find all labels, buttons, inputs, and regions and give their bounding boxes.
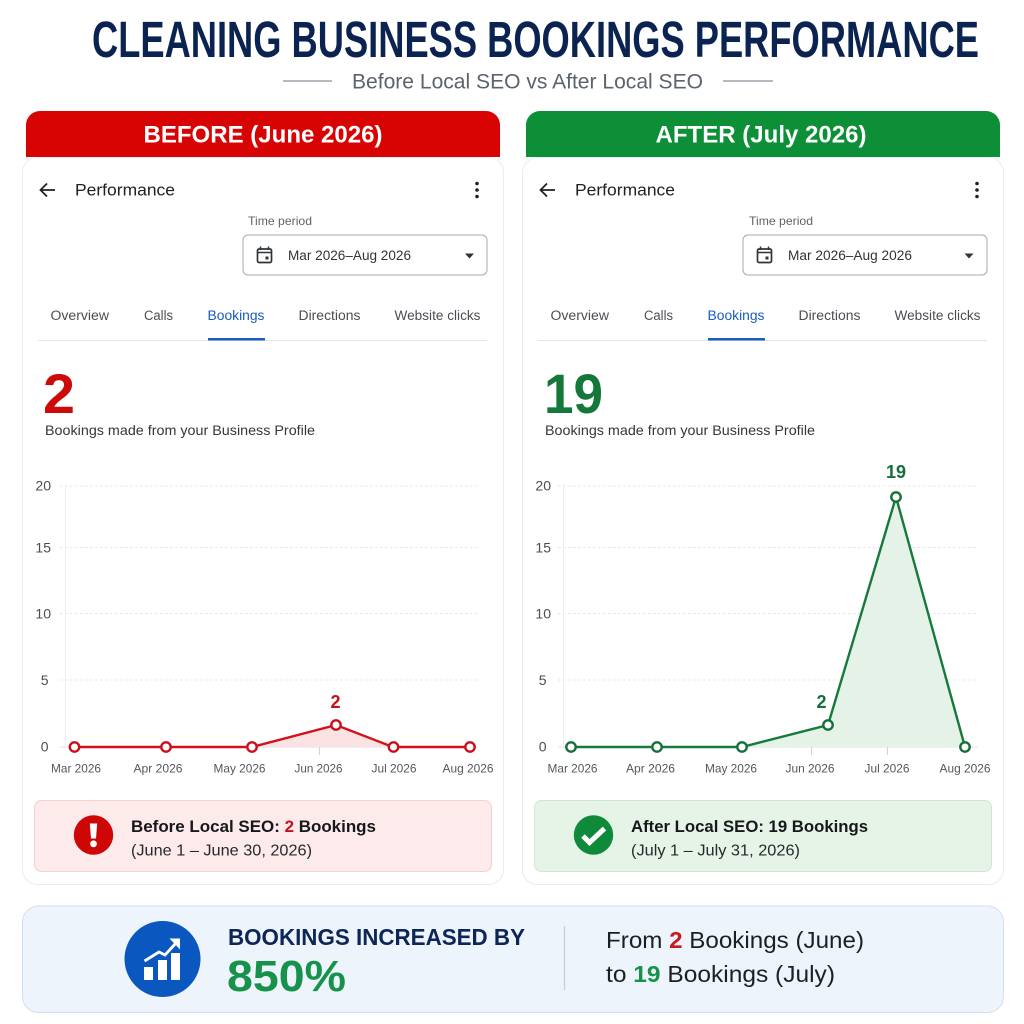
increase headline: BOOKINGS INCREASED BY — [228, 924, 525, 950]
before line chart: 15 — [35, 540, 51, 556]
after line chart: 10 — [535, 606, 551, 622]
from and to text — [606, 927, 864, 987]
before callout: Before Local SEO: 2 Bookings — [131, 818, 376, 836]
after line chart: 5 — [539, 672, 547, 688]
after tabs: Calls — [644, 308, 673, 323]
panel: after — [522, 111, 1004, 884]
before line chart: Jun 2026 — [294, 762, 343, 776]
after line chart — [535, 462, 991, 776]
after line chart: May 2026 — [705, 762, 757, 776]
before line chart: Jul 2026 — [372, 762, 417, 776]
before line chart: Apr 2026 — [134, 762, 183, 776]
after header — [526, 111, 1000, 157]
after big number — [544, 362, 815, 438]
before callout: (June 1 – June 30, 2026) — [131, 842, 312, 860]
before big number: Bookings made from your Business Profile — [45, 422, 315, 438]
after time period selector — [743, 214, 987, 275]
after line chart: 19 — [886, 462, 906, 482]
before tabs: Overview — [50, 308, 109, 323]
after line chart: 15 — [535, 540, 551, 556]
before tabs — [38, 308, 487, 340]
increase value: 850% — [227, 952, 346, 1001]
before line chart — [35, 478, 494, 776]
icon: alert — [74, 815, 113, 855]
before big number — [43, 362, 315, 438]
before header: BEFORE (June 2026) — [144, 122, 382, 148]
after callout: After Local SEO: 19 Bookings — [631, 818, 868, 836]
after big number: 19 — [544, 362, 603, 425]
after card — [522, 158, 1004, 884]
after callout — [534, 800, 992, 872]
before app bar: Performance — [75, 182, 175, 200]
before time period selector: Mar 2026–Aug 2026 — [288, 248, 411, 263]
before line chart: 20 — [35, 478, 51, 494]
after line chart: Jun 2026 — [786, 762, 835, 776]
after callout: (July 1 – July 31, 2026) — [631, 842, 800, 860]
after tabs: Directions — [798, 308, 861, 323]
after line chart: Jul 2026 — [864, 762, 910, 776]
before line chart: 5 — [41, 672, 49, 688]
from and to text: From 2 Bookings (June) — [606, 927, 864, 953]
before line chart: May 2026 — [214, 762, 266, 776]
before tabs: Calls — [144, 308, 173, 323]
before tabs: Website clicks — [394, 308, 481, 323]
panel: summary banner — [22, 906, 1004, 1012]
before app bar — [40, 182, 479, 200]
icon: check — [574, 815, 613, 855]
before line chart: Aug 2026 — [442, 762, 494, 776]
before line chart: 2 — [330, 692, 341, 712]
after time period selector: Mar 2026–Aug 2026 — [788, 248, 912, 263]
after tabs — [538, 308, 987, 340]
after line chart: Mar 2026 — [548, 762, 598, 776]
after header: AFTER (July 2026) — [656, 122, 866, 148]
after line chart: 20 — [535, 478, 551, 494]
after tabs: Bookings — [708, 308, 765, 323]
after time period selector: Time period — [749, 214, 813, 228]
after app bar — [540, 182, 979, 200]
before card — [22, 158, 504, 884]
before line chart: 10 — [35, 606, 51, 622]
after line chart: 2 — [816, 692, 827, 712]
before line chart: 0 — [41, 738, 49, 754]
after big number: Bookings made from your Business Profile — [545, 422, 815, 438]
before tabs: Directions — [298, 308, 361, 323]
before tabs: Bookings — [208, 308, 265, 323]
before time period selector — [243, 214, 487, 275]
before line chart: Mar 2026 — [51, 762, 101, 776]
before header — [26, 111, 500, 157]
icon: growth chart — [124, 921, 200, 997]
after app bar: Performance — [575, 182, 675, 200]
after tabs: Overview — [550, 308, 609, 323]
subtitle: Before Local SEO vs After Local SEO — [352, 70, 703, 94]
after line chart: 0 — [539, 738, 547, 754]
before time period selector: Time period — [248, 214, 312, 228]
panel: before — [22, 111, 504, 884]
after line chart: Aug 2026 — [940, 762, 991, 776]
from and to text: to 19 Bookings (July) — [606, 961, 835, 987]
before callout — [34, 800, 492, 872]
before big number: 2 — [43, 362, 75, 425]
after line chart: Apr 2026 — [626, 762, 675, 776]
after tabs: Website clicks — [894, 308, 981, 323]
